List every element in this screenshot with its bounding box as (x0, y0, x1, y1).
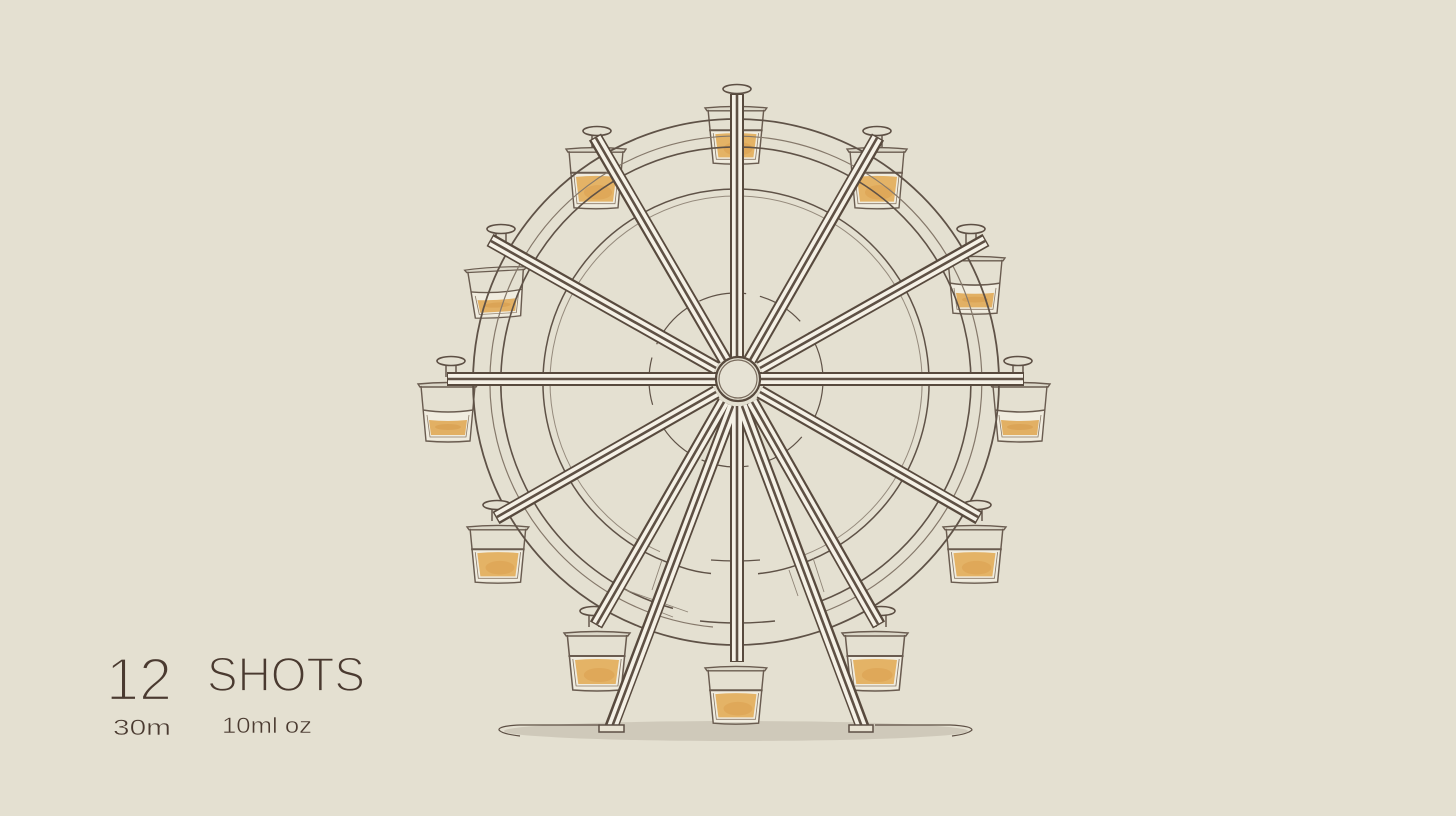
caps (437, 84, 1032, 627)
cup: upper left (566, 148, 626, 209)
cup: right upper (945, 256, 1005, 314)
heading: SHOTS (207, 649, 365, 702)
number: 12 (106, 646, 172, 713)
ring: middle sketch (711, 560, 760, 561)
cup: bottom (705, 666, 767, 724)
ring: middle thin (550, 196, 922, 556)
ring: inner dashed (649, 293, 823, 467)
ground shadow (499, 721, 972, 741)
cup: right (990, 382, 1050, 442)
ring: outer rim thin (490, 136, 982, 627)
stat: 12 shots (106, 646, 365, 740)
ring: outer (473, 119, 999, 645)
feet (599, 725, 873, 732)
cup: left lower (467, 525, 529, 583)
hub (716, 357, 760, 401)
cup: bottom left (564, 632, 630, 691)
cup: right lower (943, 525, 1006, 583)
ring: outer rim inner (501, 147, 971, 608)
cup: upper right (847, 148, 907, 209)
spokes (447, 94, 1024, 728)
ring: middle (543, 189, 929, 574)
shot glasses (418, 106, 1050, 724)
size label: 30m (113, 715, 171, 740)
cup: left upper (465, 266, 529, 319)
cup: bottom right (842, 632, 908, 691)
spoke: outlines (447, 94, 1024, 728)
spoke: center line (448, 95, 1023, 727)
wheel rings (473, 119, 999, 645)
cup: left (418, 382, 478, 442)
ring: rim bottom sketch (700, 621, 775, 623)
spoke: cream fill (448, 95, 1023, 727)
sketch lines (620, 558, 824, 617)
cup: top (705, 106, 767, 164)
volume label: 10ml oz (222, 713, 312, 738)
